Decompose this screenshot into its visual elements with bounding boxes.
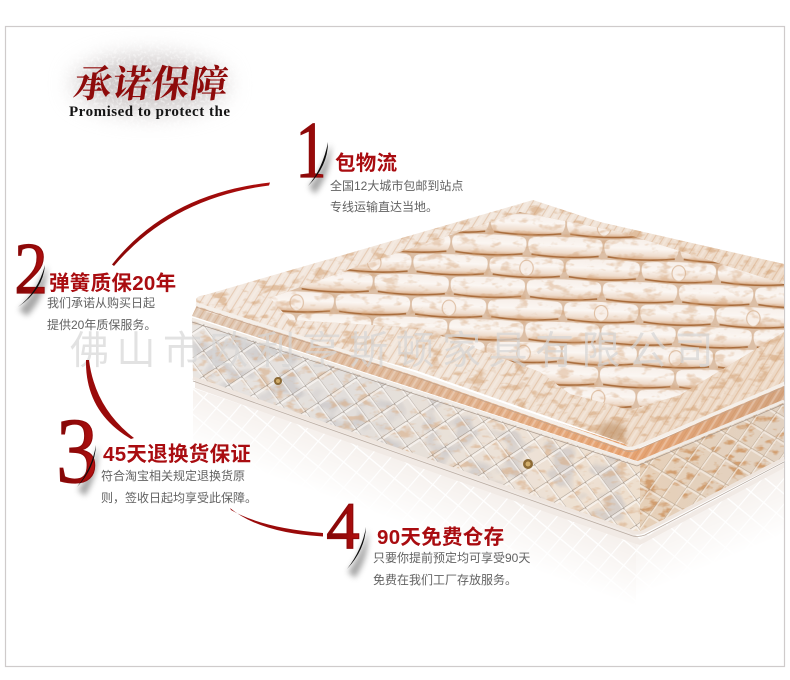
swoosh shadow [309,144,331,194]
mattress reflection [193,388,784,577]
connector arc: 1 to 2 [112,182,270,266]
number 1: 1 [295,106,327,195]
description: 专线运输直达当地。 [330,199,438,214]
item 4 [326,489,530,587]
description [101,468,257,505]
right side panel [640,400,784,533]
description: 我们承诺从购买日起 [47,295,155,310]
description [47,295,156,332]
number 2: 2 [14,228,48,310]
brand button: front [523,459,533,469]
description: 免费在我们工厂存放服务。 [373,572,517,587]
piping lines [193,378,784,533]
swoosh [77,445,96,487]
number 3: 3 [56,400,98,503]
swoosh shadow [19,266,47,316]
description [373,550,530,587]
brand button: left [274,377,282,385]
connector arc: 3 to 4 [230,508,323,536]
description: 则，签收日起均享受此保障。 [101,490,257,505]
item 1 [295,106,463,214]
swoosh [18,265,45,307]
number 4: 4 [326,489,360,563]
description: 全国12大城市包邮到站点 [330,178,463,193]
top quilting tufts [255,205,790,415]
item 3 [56,400,257,505]
heading: 90天免费仓存 [377,526,504,549]
mattress image [192,200,785,577]
description: 符合淘宝相关规定退换货原 [101,468,245,483]
gathered seam band [192,305,784,466]
smudge backdrop [55,32,255,132]
base plate [195,380,784,545]
english subtitle: Promised to protect the [69,104,230,120]
swoosh shadow [348,530,368,578]
heading: 弹簧质保20年 [49,271,176,295]
heading: 包物流 [335,152,398,175]
calligraphic title: 承诺保障 [71,53,233,108]
item 2 [14,228,176,332]
heading: 45天退换货保证 [103,442,251,466]
connector arc: 2 to 3 [86,360,134,439]
watermark: 佛山市欧利亨斯顿家具有限公司 [70,320,721,376]
swoosh shadow [78,446,98,496]
description: 提供20年质保服务。 [47,317,156,332]
heading: 承诺保障 [55,32,255,132]
description: 只要你提前预定均可享受90天 [373,550,530,565]
pillow top [190,195,790,455]
left side panel [192,318,640,533]
swoosh [347,527,366,569]
swoosh [308,142,328,186]
description [330,178,463,214]
